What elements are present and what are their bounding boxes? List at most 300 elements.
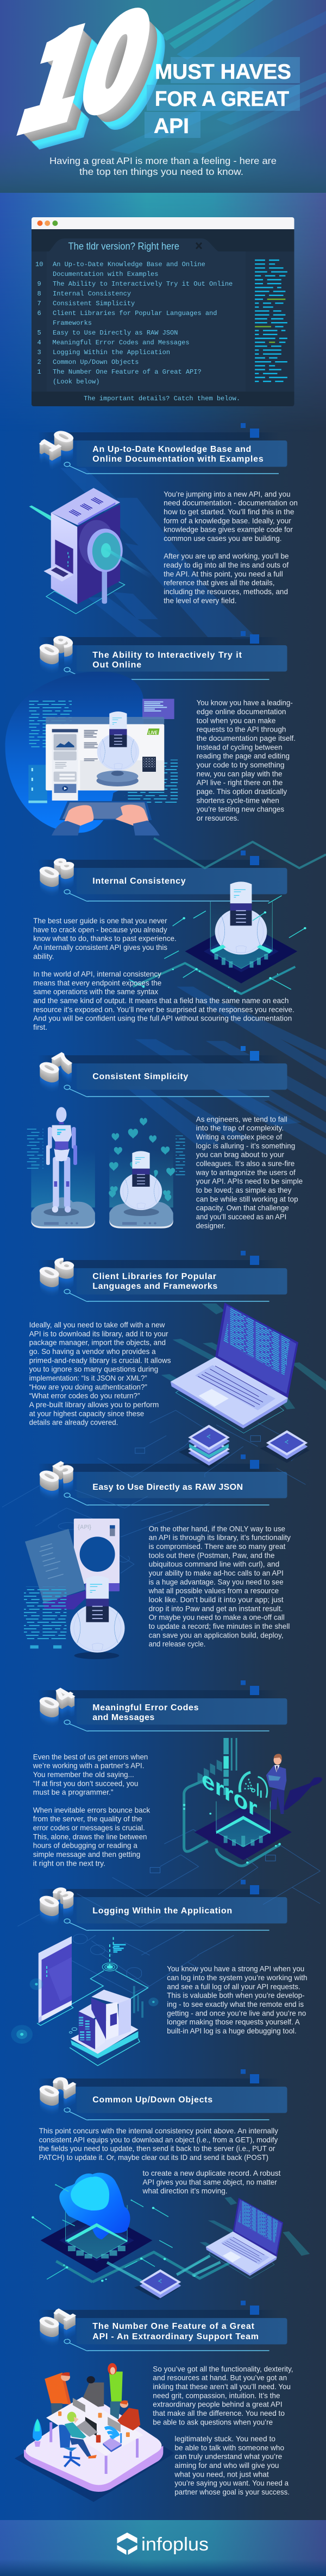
bot	[120, 1151, 162, 1210]
section 1 body text: partner whose goal is your success.	[174, 2488, 290, 2496]
bot	[70, 1576, 125, 1653]
number 05: 05	[28, 1454, 85, 1487]
section 10 body text	[164, 490, 298, 604]
section 5 heading: Easy to Use Directly as RAW JSON	[92, 1483, 243, 1492]
section 9 body text: page. This option drastically	[197, 788, 287, 796]
section 1 body text: be able to ask questions when you’re	[153, 2418, 273, 2426]
error lettering: error	[202, 1765, 258, 1823]
section 8 body text: resource it’s exposed on. You’ll never be surprised at the responses you receive.	[33, 1005, 294, 1013]
banner connector	[64, 667, 269, 679]
section 10 body text: form of a knowledge base. Ideally, your	[164, 517, 291, 525]
section 9 body text: API live - right there on the	[197, 779, 283, 787]
section 7 body text: your API. APIs need to be simple	[196, 1177, 303, 1186]
section 9 body text: you’re testing new changes	[197, 805, 284, 814]
right platform	[109, 1150, 173, 1229]
section 6 body text	[29, 1321, 171, 1427]
banner strip	[37, 860, 280, 868]
woman in green	[108, 2363, 123, 2421]
section 9 body text	[197, 699, 296, 822]
circuit lines	[56, 2252, 233, 2282]
section 9 to 8 rising circuit line	[154, 838, 326, 868]
sparks	[129, 896, 305, 990]
section 10 heading: Online Documentation with Examples	[92, 455, 264, 464]
section 5 body text: Or maybe you need to make a one-off call	[149, 1614, 285, 1622]
banner squares	[241, 1454, 259, 1469]
section 6 banner	[37, 1251, 287, 1301]
chip single	[260, 1430, 310, 1463]
{API} label on document: {API}	[78, 1524, 92, 1531]
numbered list: 2	[37, 358, 41, 366]
section 10 body text: the level of every field.	[164, 596, 237, 604]
platform shadow	[15, 2408, 174, 2502]
section 3 body text: can log into the system you’re working with	[167, 1974, 308, 1982]
section 4 body text	[33, 1753, 150, 1867]
banner strip	[37, 2310, 280, 2318]
banner squares	[241, 1046, 259, 1061]
floating code panel	[142, 699, 174, 719]
section 1 body text: can truly understand what you’re	[174, 2453, 282, 2461]
section 1 heading: The Number One Feature of a Great	[92, 2322, 255, 2331]
section 6 body text: implementation: “Is it JSON or XML?”	[29, 1374, 147, 1382]
phone panel	[52, 729, 78, 801]
section 4 body text: must be a programmer.”	[33, 1788, 114, 1797]
section 7 body text: you can brag about to your	[196, 1151, 284, 1159]
numbered list: Easy to Use Directly as RAW JSON	[53, 329, 178, 337]
section 5 body text: is a huge advantage. Say you need to see	[149, 1578, 284, 1586]
number 09: 09	[28, 627, 85, 660]
section 1 banner	[37, 2301, 287, 2351]
foreground person with chair	[59, 2412, 97, 2467]
numbered list: An Up-to-Date Knowledge Base and Online	[53, 261, 205, 268]
section 4 body text: we’re working with a partner’s API.	[33, 1762, 145, 1770]
phone base outline	[37, 2006, 73, 2025]
section 8 heading: Internal Consistency	[92, 877, 186, 886]
section 3 body text: This is valuable both when you’re develop-	[167, 1992, 305, 2000]
section 6 body text: Ideally, all you need to take off with a new	[29, 1321, 165, 1329]
section 2 body text: to create a new duplicate record. A robust	[142, 2169, 281, 2177]
robot bot	[97, 711, 139, 771]
QR code	[142, 757, 156, 772]
tab heading: The tldr version? Right here	[68, 241, 179, 252]
section 10 body text: ready to dig into all the ins and outs of	[164, 561, 289, 569]
faint circuit lines	[18, 1829, 320, 1955]
number 10: 10	[28, 423, 85, 456]
section 7 body text: to be loved; as simple as they	[196, 1186, 292, 1194]
section 10 body text: how to get started. You’ll find this in the	[164, 508, 294, 516]
section 5 body text: an API is through its library, it’s functionality	[149, 1534, 291, 1542]
section 5 body text: and release cycle.	[149, 1640, 205, 1648]
section 9 body text: tool when you can make	[197, 716, 275, 725]
server vents	[69, 497, 103, 516]
section 2 heading: Common Up/Down Objects	[92, 2095, 212, 2105]
section 5 body text: On the other hand, if the ONLY way to use	[149, 1525, 285, 1533]
table top	[46, 2397, 143, 2456]
section 6 body text: go. So having a vendor who provides a	[29, 1347, 156, 1356]
gauge	[240, 1772, 267, 1798]
banner panel	[77, 2087, 287, 2113]
server screen	[55, 539, 73, 574]
section 2 body text: This point concurs with the internal consistency point above. An internally	[39, 2127, 278, 2135]
data columns	[29, 698, 178, 804]
section 1 body text: extraordinary people behind a great API	[153, 2401, 283, 2409]
section 2 body text: consistent API equips you to download an object (i.e., from a GET), modify	[39, 2136, 278, 2144]
section 10 heading: An Up-to-Date Knowledge Base and	[92, 445, 251, 454]
keyboard shelf	[43, 566, 73, 582]
section 6 heading	[92, 1272, 217, 1291]
laptop glow stripes	[161, 1303, 326, 1409]
header diagonal stripes	[110, 0, 326, 154]
circuit nodes	[150, 1855, 275, 1873]
numbered list: 5	[37, 329, 41, 337]
banner squares	[241, 1880, 259, 1894]
laptops	[73, 2398, 121, 2437]
window title bar	[32, 217, 294, 229]
server base	[70, 2017, 140, 2065]
header background	[0, 0, 326, 193]
panel: tldr code window	[32, 217, 294, 406]
faint circuit lines	[2, 1410, 305, 1521]
numbered list: 9	[37, 280, 41, 288]
teal band below header	[0, 193, 326, 432]
section 10 body text: You’re jumping into a new API, and you	[164, 490, 291, 498]
glass box	[210, 902, 272, 968]
window footer text: The important details? Catch them below.	[84, 395, 240, 402]
numbered list: Internal Consistency	[53, 290, 131, 298]
number 01: 01	[28, 2300, 85, 2333]
data columns	[24, 1587, 66, 1647]
section 2 banner	[37, 2069, 287, 2120]
LIVE badge	[147, 728, 159, 735]
header subtitle: the top ten things you need to know.	[79, 166, 243, 177]
footer logo: infoplus hexagon	[117, 2533, 137, 2555]
plant	[33, 2418, 42, 2447]
keyboard	[59, 801, 152, 820]
section 7 body text: and you’ll succeed as an API	[196, 1213, 286, 1221]
section 5 body text	[148, 1525, 291, 1648]
section 1 body text: that make all the difference. You need to	[153, 2409, 285, 2417]
tab close icon	[196, 243, 202, 249]
section 3 body text: longer making those requests yourself. A	[167, 2018, 300, 2026]
signal rings	[102, 1937, 117, 1971]
logging code snippet	[114, 1945, 126, 1952]
sparks	[33, 2185, 208, 2279]
numbered list: Documentation with Examples	[53, 270, 158, 278]
window traffic light dots	[37, 221, 58, 226]
section 5 body text: your ability to make ad-hoc calls to an API	[149, 1569, 284, 1577]
circuit dots	[183, 1804, 281, 1863]
section 9 body text: requests to the API through	[197, 726, 286, 734]
section 4 banner	[37, 1680, 287, 1731]
blue blob	[5, 672, 143, 833]
section 3 banner	[37, 1880, 287, 1930]
illustration: server with magnifier	[29, 488, 153, 614]
numbered list: Client Libraries for Popular Languages and	[53, 310, 217, 317]
section 1 body text: So you’ve got all the functionality, dexterity,	[153, 2365, 293, 2373]
code area	[32, 251, 294, 392]
section 5 body text: look like. Don’t build it into your app; just	[149, 1596, 284, 1604]
section 8 body text: The best user guide is one that you never	[33, 917, 167, 925]
section 10 body text: reference that gives all the details,	[164, 579, 275, 587]
cloud	[59, 2173, 130, 2239]
section 4 body text: You remember the old saying...	[33, 1771, 134, 1779]
wifi router	[103, 2428, 122, 2452]
floating tiles	[198, 1760, 222, 1784]
banner connector	[64, 890, 269, 901]
banner connector	[64, 462, 279, 474]
illustration: internal consistency bot on chip	[129, 881, 306, 994]
section 9 body text: You know you have a leading-	[197, 699, 293, 707]
tilted code sheet	[25, 1529, 86, 1609]
banner squares	[241, 631, 259, 644]
numbered list: Meaningful Error Codes and Messages	[52, 339, 190, 347]
illustration: live API documentation on monitor	[5, 672, 178, 835]
teal beam left	[29, 506, 51, 520]
banner panel	[77, 1698, 287, 1725]
section 5 banner	[37, 1454, 287, 1505]
section 7 body text: can be while still working at top	[196, 1195, 298, 1203]
banner panel	[77, 440, 287, 467]
section 6 body text: package manager, import the objects, and	[29, 1339, 166, 1347]
magnifier beam	[103, 547, 153, 578]
faint circuit lines	[72, 1934, 199, 1998]
section 7 body text: capacity. Own that challenge	[196, 1204, 289, 1212]
section 3 body text	[167, 1965, 308, 2035]
cyan feet	[210, 944, 272, 953]
section 5 body text: what all possible values from a resource	[148, 1587, 279, 1595]
hearts	[109, 1118, 175, 1201]
section 7 body text: logic is alluring - it’s something	[196, 1142, 295, 1150]
section 6 body text: A pre-built library allows you to perform	[29, 1401, 159, 1409]
platform top	[26, 2403, 162, 2485]
platform side	[24, 2446, 163, 2492]
section 5 body text: ubiquitous command line with curl), and	[149, 1560, 279, 1569]
section 1 body text: be able to talk with someone who	[174, 2443, 284, 2452]
banner panel	[77, 1472, 287, 1498]
orange person	[45, 2372, 70, 2417]
section 6 body text: “How are you doing authentication?”	[29, 1383, 147, 1391]
section 8 body text: An internally consistent API gives you this	[33, 943, 167, 952]
banner strip	[37, 637, 280, 645]
banner squares	[241, 423, 259, 438]
section 10 body text: including the resources, methods, and	[164, 588, 288, 596]
section 1 body text: aiming for and who will give you	[174, 2461, 279, 2470]
banner connector	[64, 1289, 269, 1301]
section 4 body text: hours of debugging or reading a	[33, 1842, 137, 1850]
section 7 banner	[37, 1046, 287, 1097]
section 8 and 7 diagonal stripes	[135, 987, 326, 1126]
section 4 body text: When inevitable errors bounce back	[33, 1806, 150, 1814]
section 7 body text: Writing a complex piece of	[196, 1133, 282, 1141]
circuit line	[72, 1970, 148, 2004]
section 1 body text: inkling that these aren’t all you’ll need. You	[153, 2383, 291, 2391]
banner strip	[37, 1690, 280, 1698]
main title: MUST HAVES	[155, 60, 291, 84]
section 1 heading: API - An Extraordinary Support Team	[92, 2332, 259, 2341]
section 4 body text: Even the best of us get errors when	[33, 1753, 148, 1761]
section 8 body text: same operations with the same syntax	[33, 988, 158, 996]
section 5 body text: tools out there (Postman, Paw, and the	[149, 1551, 275, 1559]
numbered list: Common Up/Down Objects	[53, 358, 139, 366]
section 5 body text: to update a record; five minutes in the shell	[149, 1622, 290, 1630]
section 10 body text: common use cases you are building.	[164, 534, 281, 543]
numbered list: 10	[35, 261, 43, 268]
section 9 heading	[92, 651, 242, 670]
banner panel	[77, 868, 287, 894]
numbered list: Frameworks	[53, 319, 92, 327]
section 8 body text: have to crack open - because you already	[33, 925, 167, 934]
businessman	[266, 1754, 286, 1814]
teal side panel	[28, 765, 47, 803]
numbered list	[35, 261, 233, 386]
section 4 body text: simple message and then getting	[33, 1850, 140, 1859]
section 9 body text: the documentation page itself.	[197, 734, 296, 742]
data columns	[27, 1128, 185, 1177]
section 9 body text: shortens cycle-time when	[197, 796, 279, 804]
laptop	[206, 2198, 283, 2279]
chip platform	[185, 921, 297, 984]
section 8 body text: know what to do, thanks to past experience.	[33, 935, 177, 943]
section 6 body text: you to ignore so many questions during	[29, 1365, 158, 1374]
headset person	[117, 2401, 140, 2430]
table legs	[51, 2422, 137, 2474]
banner connector	[64, 1720, 269, 1731]
section 4 body text: This, alone, draws the line between	[33, 1832, 147, 1841]
section 1 heading	[92, 2322, 259, 2341]
section 2 body text: what direction it’s moving.	[142, 2187, 228, 2195]
circuit lines	[133, 963, 295, 994]
monitor	[46, 717, 164, 790]
glass panel	[216, 1802, 270, 1847]
numbered list: The Ability to Interactively Try it Out Online	[53, 280, 233, 288]
section 10 body text: knowledge base gives example code for	[164, 526, 293, 534]
illustration: raw JSON document with bot	[24, 1503, 210, 1659]
monitor text blocks	[84, 730, 98, 760]
banner strip	[37, 2079, 280, 2087]
section 9 body text: reading the page and editing	[197, 752, 290, 760]
chip stack	[179, 1425, 231, 1468]
banner squares	[241, 1251, 259, 1265]
window tab	[49, 238, 218, 251]
faint circuit lines	[35, 1503, 210, 1573]
banner panel	[77, 645, 287, 671]
banner panel	[77, 1897, 287, 1924]
robot figure	[46, 1107, 77, 1213]
section 10 body text: the API. At this point, you need a full	[164, 570, 283, 578]
footer band	[0, 2520, 326, 2576]
numbered list: (Look below)	[53, 378, 99, 386]
numbered list: Logging Within the Application	[53, 349, 170, 356]
section 6 heading: Languages and Frameworks	[92, 1282, 217, 1291]
section 4 heading: Meaningful Error Codes	[92, 1703, 199, 1712]
number 03: 03	[28, 1879, 85, 1913]
left hand	[52, 805, 93, 835]
number 06: 06	[28, 1250, 85, 1284]
numbered list: The Number One Feature of a Great API?	[53, 368, 202, 376]
section 1 body text: and resources at hand. But you’ve got an	[153, 2374, 287, 2382]
section 2 body text: the fields you need to update, then send it back to the server (i.e., PUT or	[39, 2145, 275, 2153]
section 9 body text: edge online documentation	[197, 708, 286, 716]
numbered list: 3	[37, 349, 41, 356]
illustration: logging servers and phone	[11, 1934, 199, 2065]
section 9 heading: The Ability to Interactively Try it	[92, 651, 242, 660]
code minimap	[255, 260, 287, 381]
number 04: 04	[28, 1680, 85, 1714]
number 08: 08	[28, 850, 85, 883]
numbered list: 4	[37, 339, 41, 347]
section 9 body text: or resources.	[197, 814, 239, 822]
section 8 body text	[33, 917, 294, 1031]
section 1 body text: what you need, not just what	[174, 2470, 269, 2478]
glow dots	[11, 1979, 159, 2044]
businessman shadow	[283, 1777, 322, 1810]
section 8 body text: In the world of API, internal consistency	[33, 970, 161, 978]
section 7 body text: As engineers, we tend to fall	[196, 1115, 287, 1123]
chip platform	[195, 1806, 292, 1860]
section 6 heading: Client Libraries for Popular	[92, 1272, 216, 1281]
section 3 body text: ing - to see exactly what the remote end is	[167, 2000, 304, 2008]
section 3 body text: You know you have a strong API when you	[167, 1965, 304, 1973]
banner strip	[37, 432, 280, 440]
numbered list: 6	[37, 310, 41, 317]
right hand	[115, 804, 160, 835]
main title: FOR A GREAT	[155, 87, 289, 111]
section 4 body text: error codes or messages is crucial.	[33, 1824, 145, 1832]
section 3 body text: built-in API log is a huge debugging tool.	[167, 2027, 297, 2035]
left glass platform	[31, 1150, 95, 1229]
section 6 body text: at your highest capacity since these	[29, 1409, 144, 1418]
LIVE label: LIVE	[148, 730, 158, 735]
section 1 body text: you’re saying you want. You need a	[174, 2479, 289, 2487]
banner strip	[37, 1055, 280, 1063]
illustration: robot and bot with hearts	[27, 1107, 185, 1229]
section 5 body text: drop it into Paw and get an instant result.	[149, 1604, 283, 1613]
banner panel	[77, 1063, 287, 1089]
section 9 banner	[37, 631, 287, 679]
chip	[134, 2269, 181, 2300]
magnifier	[79, 520, 123, 604]
section 3 heading: Logging Within the Application	[92, 1906, 232, 1916]
connector lines	[107, 2256, 221, 2281]
section 5 body text: can save you an application build, deploy,	[149, 1631, 284, 1639]
section 8 body text: And you will be confident using the full API without scouring the documentation	[33, 1015, 292, 1023]
section 8 body text: and the same kind of output. It means that a field has the same name on each	[33, 997, 289, 1005]
floor outline	[46, 581, 125, 614]
banner strip	[37, 1889, 280, 1897]
section 4 body text: “If at first you don’t succeed, you	[33, 1779, 138, 1787]
section 9 heading: Out Online	[92, 660, 141, 670]
section 6 body text: primed-and-ready library is crucial. It allows	[29, 1356, 171, 1364]
section 1 body text	[153, 2365, 293, 2496]
section 4 body text: from the server, the quality of the	[33, 1815, 142, 1823]
header subtitle	[49, 155, 277, 177]
section 4 heading: and Messages	[92, 1713, 154, 1722]
chevron	[216, 1816, 270, 1834]
bot base	[97, 771, 139, 786]
phone	[39, 1936, 72, 2023]
section 1 body text: need grit, compassion, intuition. It’s the	[153, 2391, 280, 2399]
section 10 banner	[37, 423, 287, 474]
section 8 banner	[37, 851, 287, 901]
illustration: cloud, chip and laptop	[32, 2173, 310, 2300]
section 7 heading: Consistent Simplicity	[92, 1072, 188, 1081]
header subtitle: Having a great API is more than a feeling - here are	[49, 155, 277, 166]
numbered list: 8	[37, 290, 41, 298]
section 8 body text: first.	[33, 1023, 47, 1031]
section 2 body text	[39, 2127, 281, 2195]
bot	[215, 881, 267, 955]
glow bars	[133, 1986, 143, 2018]
numbered list: 7	[37, 300, 41, 307]
